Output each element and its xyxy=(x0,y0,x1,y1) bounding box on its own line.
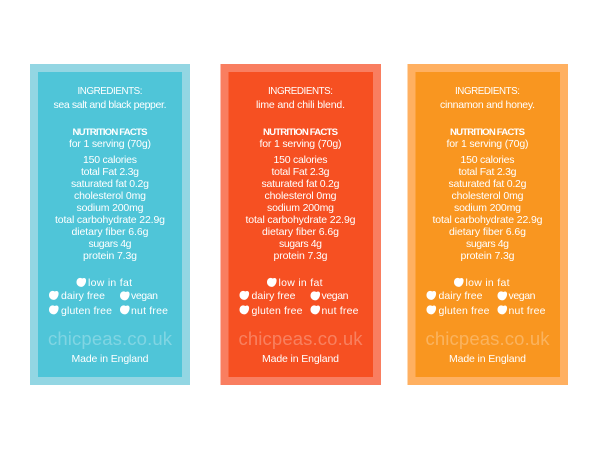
ingredients text: sea salt and black pepper. xyxy=(54,99,166,111)
nutrition list: total carbohydrate 22.9g xyxy=(55,214,165,226)
panel fill xyxy=(228,72,373,377)
nutrition list: cholesterol 0mg xyxy=(74,190,146,202)
nutrition list: cholesterol 0mg xyxy=(452,190,524,202)
ingredients text: INGREDIENTS: xyxy=(455,86,520,97)
nutrition list xyxy=(55,154,165,262)
nutrition list: protein 7.3g xyxy=(274,250,328,262)
nutrition list: protein 7.3g xyxy=(460,250,515,262)
panel border xyxy=(30,64,190,385)
nutrition facts heading: NUTRITION FACTS xyxy=(450,127,526,138)
dietary badges: low in fat xyxy=(278,277,323,289)
nutrition list: 150 calories xyxy=(83,154,137,166)
nutrition list: total Fat 2.3g xyxy=(458,166,517,178)
nutrition list: sugars 4g xyxy=(88,238,132,250)
dietary badges: nut free xyxy=(131,305,168,317)
ingredients text xyxy=(440,86,535,111)
nutrition facts heading: for 1 serving (70g) xyxy=(69,138,151,150)
panel fill xyxy=(416,72,560,377)
ingredients text: cinnamon and honey. xyxy=(440,99,535,111)
origin note: Made in England xyxy=(262,353,339,365)
origin note: Made in England xyxy=(72,353,149,365)
ingredients text: INGREDIENTS: xyxy=(268,86,333,97)
dietary badges xyxy=(240,277,359,317)
dietary badges: vegan xyxy=(131,290,158,302)
panel: cinnamon and honey label xyxy=(408,64,568,385)
nutrition list: sodium 200mg xyxy=(267,202,334,214)
panel fill xyxy=(38,72,182,377)
website: chicpeas.co.uk xyxy=(238,328,363,349)
dietary badges: gluten free xyxy=(61,305,112,317)
nutrition facts heading: NUTRITION FACTS xyxy=(263,127,339,138)
nutrition list xyxy=(432,154,543,262)
ingredients text xyxy=(256,86,345,111)
nutrition list xyxy=(246,154,356,262)
ingredients text: lime and chili blend. xyxy=(256,99,345,111)
nutrition list: saturated fat 0.2g xyxy=(448,178,527,190)
ingredients text xyxy=(54,86,166,111)
nutrition list: total Fat 2.3g xyxy=(81,166,139,178)
nutrition facts heading: for 1 serving (70g) xyxy=(260,138,342,150)
dietary badges: nut free xyxy=(508,305,546,317)
dietary badges xyxy=(426,277,546,317)
panel: sea salt and black pepper label xyxy=(30,64,190,385)
nutrition facts heading: NUTRITION FACTS xyxy=(72,127,148,138)
dietary badges: nut free xyxy=(322,305,359,317)
website: chicpeas.co.uk xyxy=(426,328,550,349)
nutrition list: total Fat 2.3g xyxy=(272,166,330,178)
dietary badges: low in fat xyxy=(88,277,132,289)
nutrition list: 150 calories xyxy=(274,154,328,166)
nutrition facts heading xyxy=(446,127,528,150)
dietary badges: gluten free xyxy=(438,305,490,317)
dietary badges: dairy free xyxy=(438,290,483,302)
nutrition list: sugars 4g xyxy=(466,238,509,250)
panel: lime and chili blend label xyxy=(220,64,381,385)
origin note: Made in England xyxy=(449,353,526,365)
dietary badges xyxy=(49,277,168,317)
nutrition list: dietary fiber 6.6g xyxy=(449,226,526,238)
dietary badges: vegan xyxy=(322,290,349,302)
nutrition list: sodium 200mg xyxy=(454,202,521,214)
dietary badges: gluten free xyxy=(252,305,303,317)
nutrition list: total carbohydrate 22.9g xyxy=(246,214,356,226)
nutrition list: dietary fiber 6.6g xyxy=(262,226,339,238)
nutrition list: saturated fat 0.2g xyxy=(71,178,149,190)
nutrition list: total carbohydrate 22.9g xyxy=(432,214,543,226)
nutrition list: saturated fat 0.2g xyxy=(262,178,340,190)
website: chicpeas.co.uk xyxy=(48,328,173,349)
nutrition facts heading: for 1 serving (70g) xyxy=(446,138,528,150)
nutrition list: sugars 4g xyxy=(279,238,322,250)
nutrition list: 150 calories xyxy=(460,154,514,166)
dietary badges: dairy free xyxy=(252,290,296,302)
dietary badges: low in fat xyxy=(466,277,510,289)
nutrition list: protein 7.3g xyxy=(83,250,137,262)
nutrition list: dietary fiber 6.6g xyxy=(72,226,149,238)
dietary badges: dairy free xyxy=(61,290,105,302)
nutrition facts heading xyxy=(260,127,342,150)
panel border xyxy=(408,64,568,385)
panel border xyxy=(220,64,381,385)
nutrition facts heading xyxy=(69,127,151,150)
ingredients text: INGREDIENTS: xyxy=(78,86,142,97)
nutrition list: sodium 200mg xyxy=(76,202,144,214)
dietary badges: vegan xyxy=(508,290,536,302)
nutrition list: cholesterol 0mg xyxy=(264,190,337,202)
